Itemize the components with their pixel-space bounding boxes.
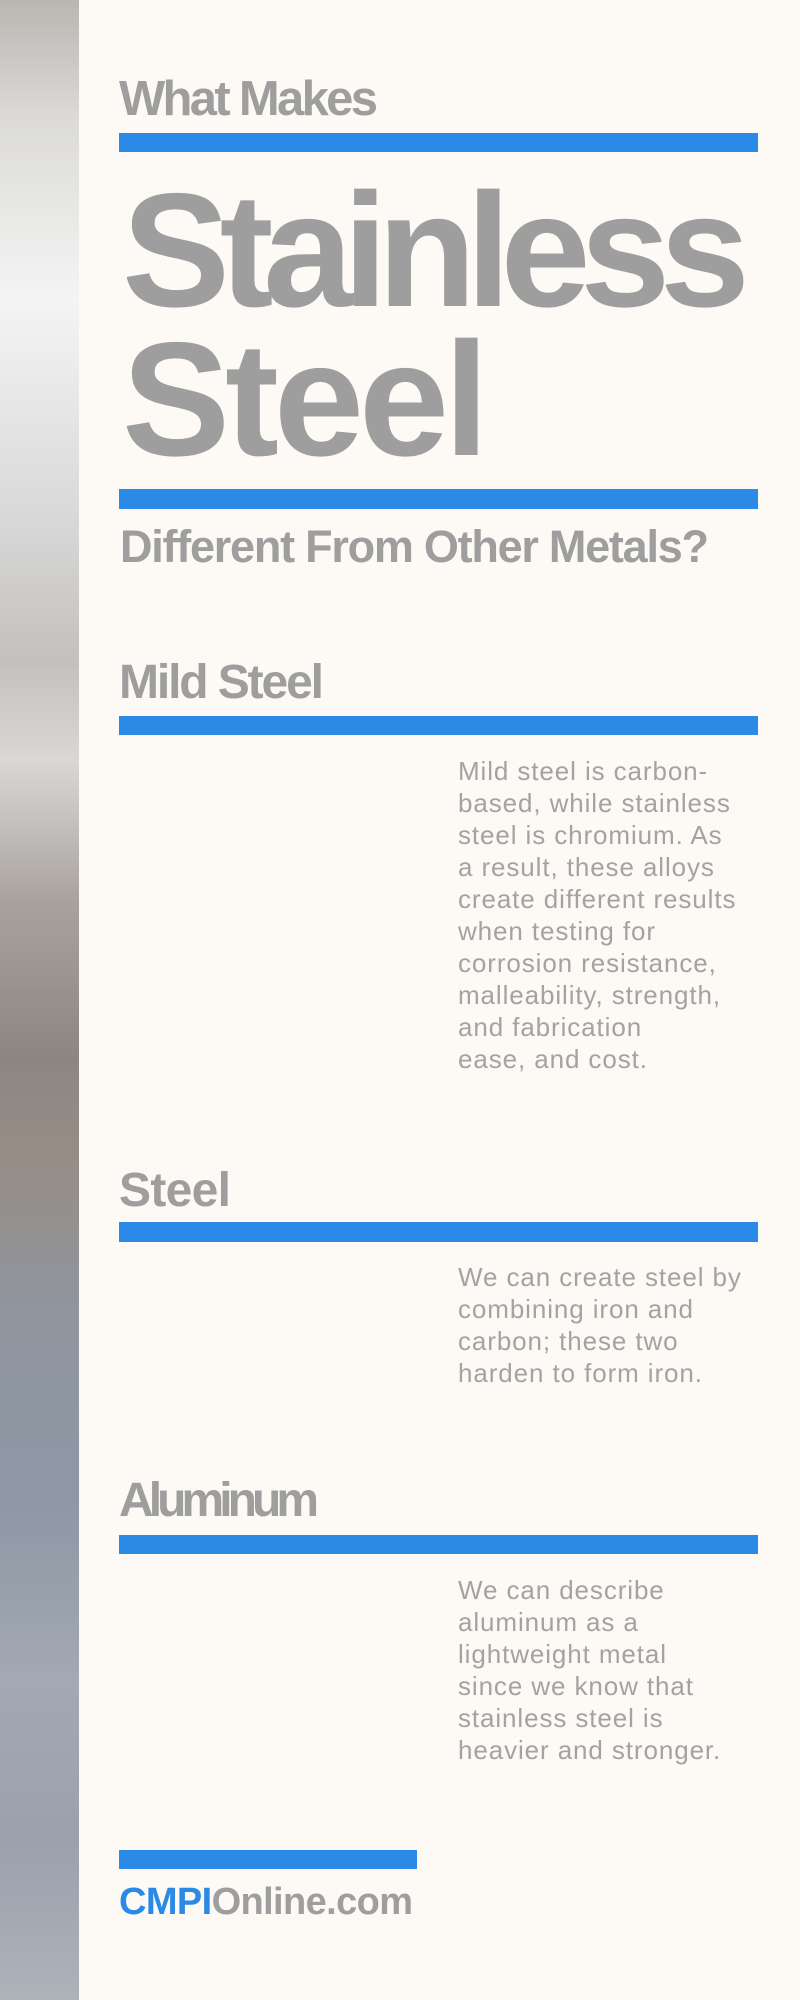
section: Mild Steel: create different results	[458, 884, 736, 914]
section: Mild Steel	[119, 656, 758, 1074]
section: Mild Steel: when testing for	[457, 916, 656, 946]
left metal strip	[0, 0, 79, 2000]
section: Aluminum: We can describe	[458, 1575, 665, 1605]
section: Aluminum	[119, 1474, 758, 1765]
section: Steel: We can create steel by	[458, 1262, 742, 1292]
footer logo	[119, 1850, 417, 1923]
section: Steel	[119, 1164, 758, 1388]
section: Steel: carbon; these two	[458, 1326, 679, 1356]
title: Stainless Steel: Stainless	[122, 160, 750, 341]
section: Mild Steel: malleability, strength,	[458, 980, 721, 1010]
subtitle: Different From Other Metals?	[120, 521, 709, 572]
section: Mild Steel: corrosion resistance,	[458, 948, 717, 978]
section: Mild Steel: Mild Steel	[119, 656, 324, 709]
section: Steel: harden to form iron.	[458, 1358, 703, 1388]
section: Mild Steel: steel is chromium. As	[458, 820, 723, 850]
section: Mild Steel: and fabrication	[458, 1012, 642, 1042]
section: Mild Steel: based, while stainless	[458, 788, 731, 818]
section: Mild Steel: Mild steel is carbon-	[458, 756, 708, 786]
section: Steel: Steel	[119, 1164, 231, 1217]
section: Aluminum: Aluminum	[119, 1474, 319, 1527]
section: Aluminum: since we know that	[458, 1671, 694, 1701]
section: Aluminum: heavier and stronger.	[458, 1735, 721, 1765]
footer logo: CMPIOnline.com	[119, 1881, 413, 1923]
section: Steel: combining iron and	[458, 1294, 694, 1324]
section: Mild Steel: a result, these alloys	[458, 852, 715, 882]
section: Aluminum: aluminum as a	[458, 1607, 639, 1637]
title: Stainless Steel: Steel	[122, 309, 489, 490]
section: Aluminum: stainless steel is	[458, 1703, 664, 1733]
section: Mild Steel: ease, and cost.	[458, 1044, 648, 1074]
title: What Makes: What Makes	[119, 72, 378, 126]
section: Aluminum: lightweight metal	[458, 1639, 667, 1669]
title: Stainless Steel	[122, 160, 750, 490]
